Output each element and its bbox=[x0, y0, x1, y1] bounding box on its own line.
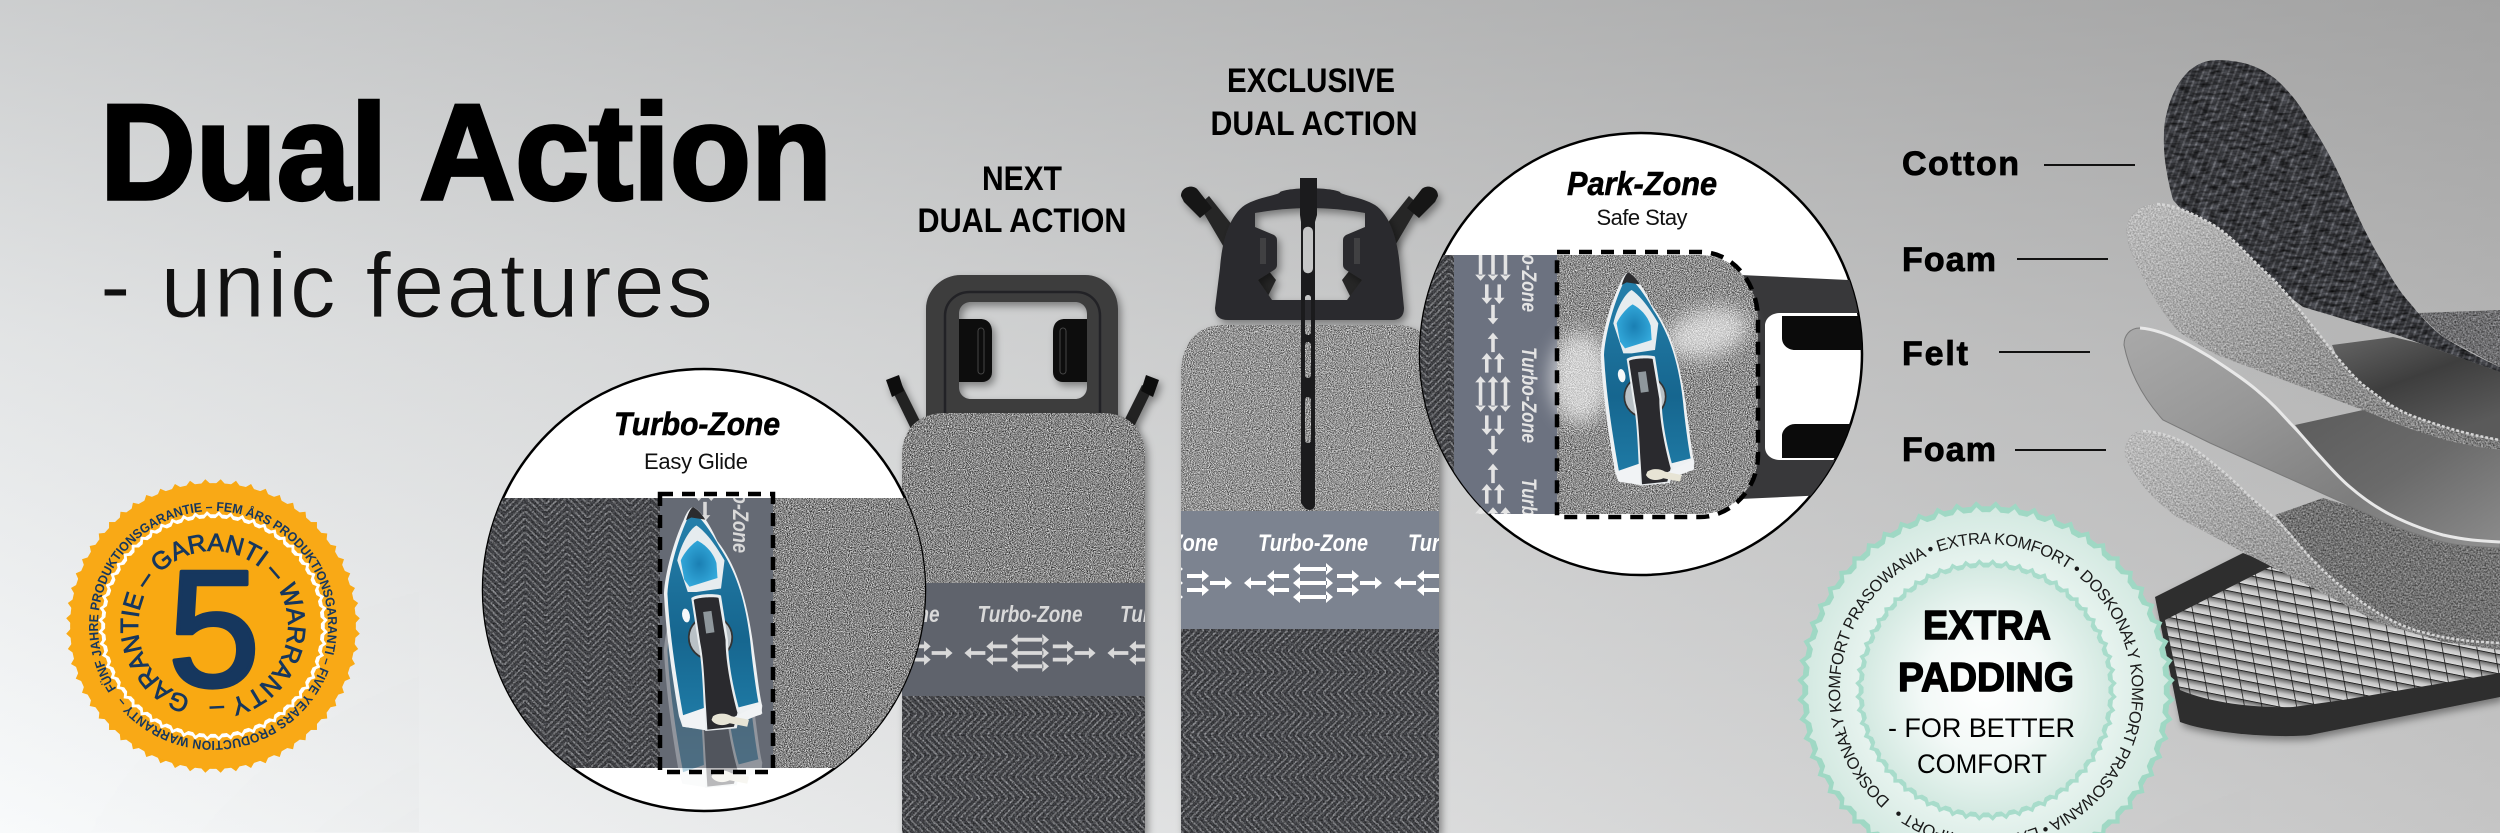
board cover: Turbo-Zone bbox=[1108, 530, 1218, 557]
layer: upper foam bbox=[2127, 204, 2500, 450]
layer labels: Foam bbox=[1902, 241, 1996, 279]
label: next dual action: NEXT bbox=[982, 160, 1062, 198]
layer labels: Cotton bbox=[1902, 145, 2019, 183]
mesh base bbox=[2155, 553, 2500, 736]
callout subheading: Safe Stay bbox=[1596, 205, 1688, 230]
layer: cotton back bbox=[2418, 310, 2500, 367]
layer: cotton bbox=[2164, 60, 2500, 372]
iron reflection bbox=[664, 564, 762, 788]
band markings bbox=[696, 498, 748, 552]
ironing board: next dual action bbox=[886, 274, 1165, 833]
iron rest legs bbox=[886, 375, 1159, 431]
board cover: Turbo-Zone bbox=[1408, 530, 1518, 557]
leader lines bbox=[1999, 165, 2135, 450]
band markings: Turbo-Zone bbox=[1517, 216, 1540, 312]
steam bbox=[1550, 299, 1754, 424]
band markings: Turbo-Zone bbox=[728, 453, 753, 553]
badge text bbox=[1888, 602, 2075, 779]
dashed zone outline bbox=[660, 494, 773, 772]
badge text: COMFORT bbox=[1917, 749, 2047, 779]
badge: 5 year warranty: 5 bbox=[168, 537, 260, 722]
callout heading: Park-Zone bbox=[1567, 165, 1717, 202]
icon: iron bbox=[1601, 272, 1694, 486]
label: next dual action bbox=[918, 160, 1126, 240]
iron rest legs bbox=[1181, 187, 1438, 300]
badge text: - FOR BETTER bbox=[1888, 713, 2075, 743]
board cover: Turbo-Zone bbox=[978, 601, 1083, 627]
board cover bbox=[1179, 324, 1447, 833]
band markings bbox=[1475, 255, 1538, 514]
board cover: Turbo-Zone bbox=[1120, 601, 1225, 627]
hanging hook bar bbox=[1300, 178, 1317, 510]
icon: iron bbox=[664, 507, 762, 731]
ironing board: exclusive dual action bbox=[1179, 178, 1447, 833]
badge: 5 year warranty: FÜNF JAHRE PRODUKTIONSGARANTIE – FEM ÅRS PRODUKTIONSGARANTI – FIVE YEARS PRODUCTION WARRANTY – bbox=[89, 502, 337, 750]
label: exclusive dual action bbox=[1210, 62, 1418, 143]
badge: 5 year warranty: GARANTIE – GARANTI – WARRANTY – bbox=[120, 533, 306, 716]
board cover bbox=[900, 413, 1153, 833]
layer: upper foam surface bbox=[2332, 337, 2500, 440]
badge text: PADDING bbox=[1898, 654, 2074, 700]
callout subheading: Easy Glide bbox=[644, 449, 748, 474]
callout heading: Turbo-Zone bbox=[614, 406, 780, 442]
layer: felt bbox=[2124, 328, 2500, 548]
park handle bbox=[1742, 275, 1858, 499]
layer labels: Felt bbox=[1902, 335, 1968, 373]
callout: turbo zone bbox=[480, 369, 932, 811]
label: next dual action: DUAL ACTION bbox=[918, 202, 1126, 240]
exploded padding layers bbox=[2124, 60, 2500, 736]
label: exclusive dual action: DUAL ACTION bbox=[1210, 105, 1418, 143]
handle bbox=[1215, 188, 1404, 320]
band markings: Turbo-Zone bbox=[1517, 478, 1540, 574]
layer: lower foam bbox=[2125, 431, 2500, 650]
layer labels: Foam bbox=[1902, 431, 1996, 469]
board cover: Turbo-Zone bbox=[834, 601, 940, 627]
title: Dual Action bbox=[100, 76, 832, 228]
dashed zone outline bbox=[1557, 252, 1758, 517]
subtitle: - unic features bbox=[100, 235, 713, 337]
board cover: Turbo-Zone bbox=[1258, 530, 1368, 557]
callout: park zone bbox=[1410, 133, 1870, 586]
handle bbox=[926, 275, 1118, 430]
badge text: EXTRA bbox=[1923, 602, 2051, 648]
band markings: Turbo-Zone bbox=[1517, 347, 1540, 443]
layer labels bbox=[1902, 145, 2019, 469]
label: exclusive dual action: EXCLUSIVE bbox=[1227, 62, 1395, 100]
